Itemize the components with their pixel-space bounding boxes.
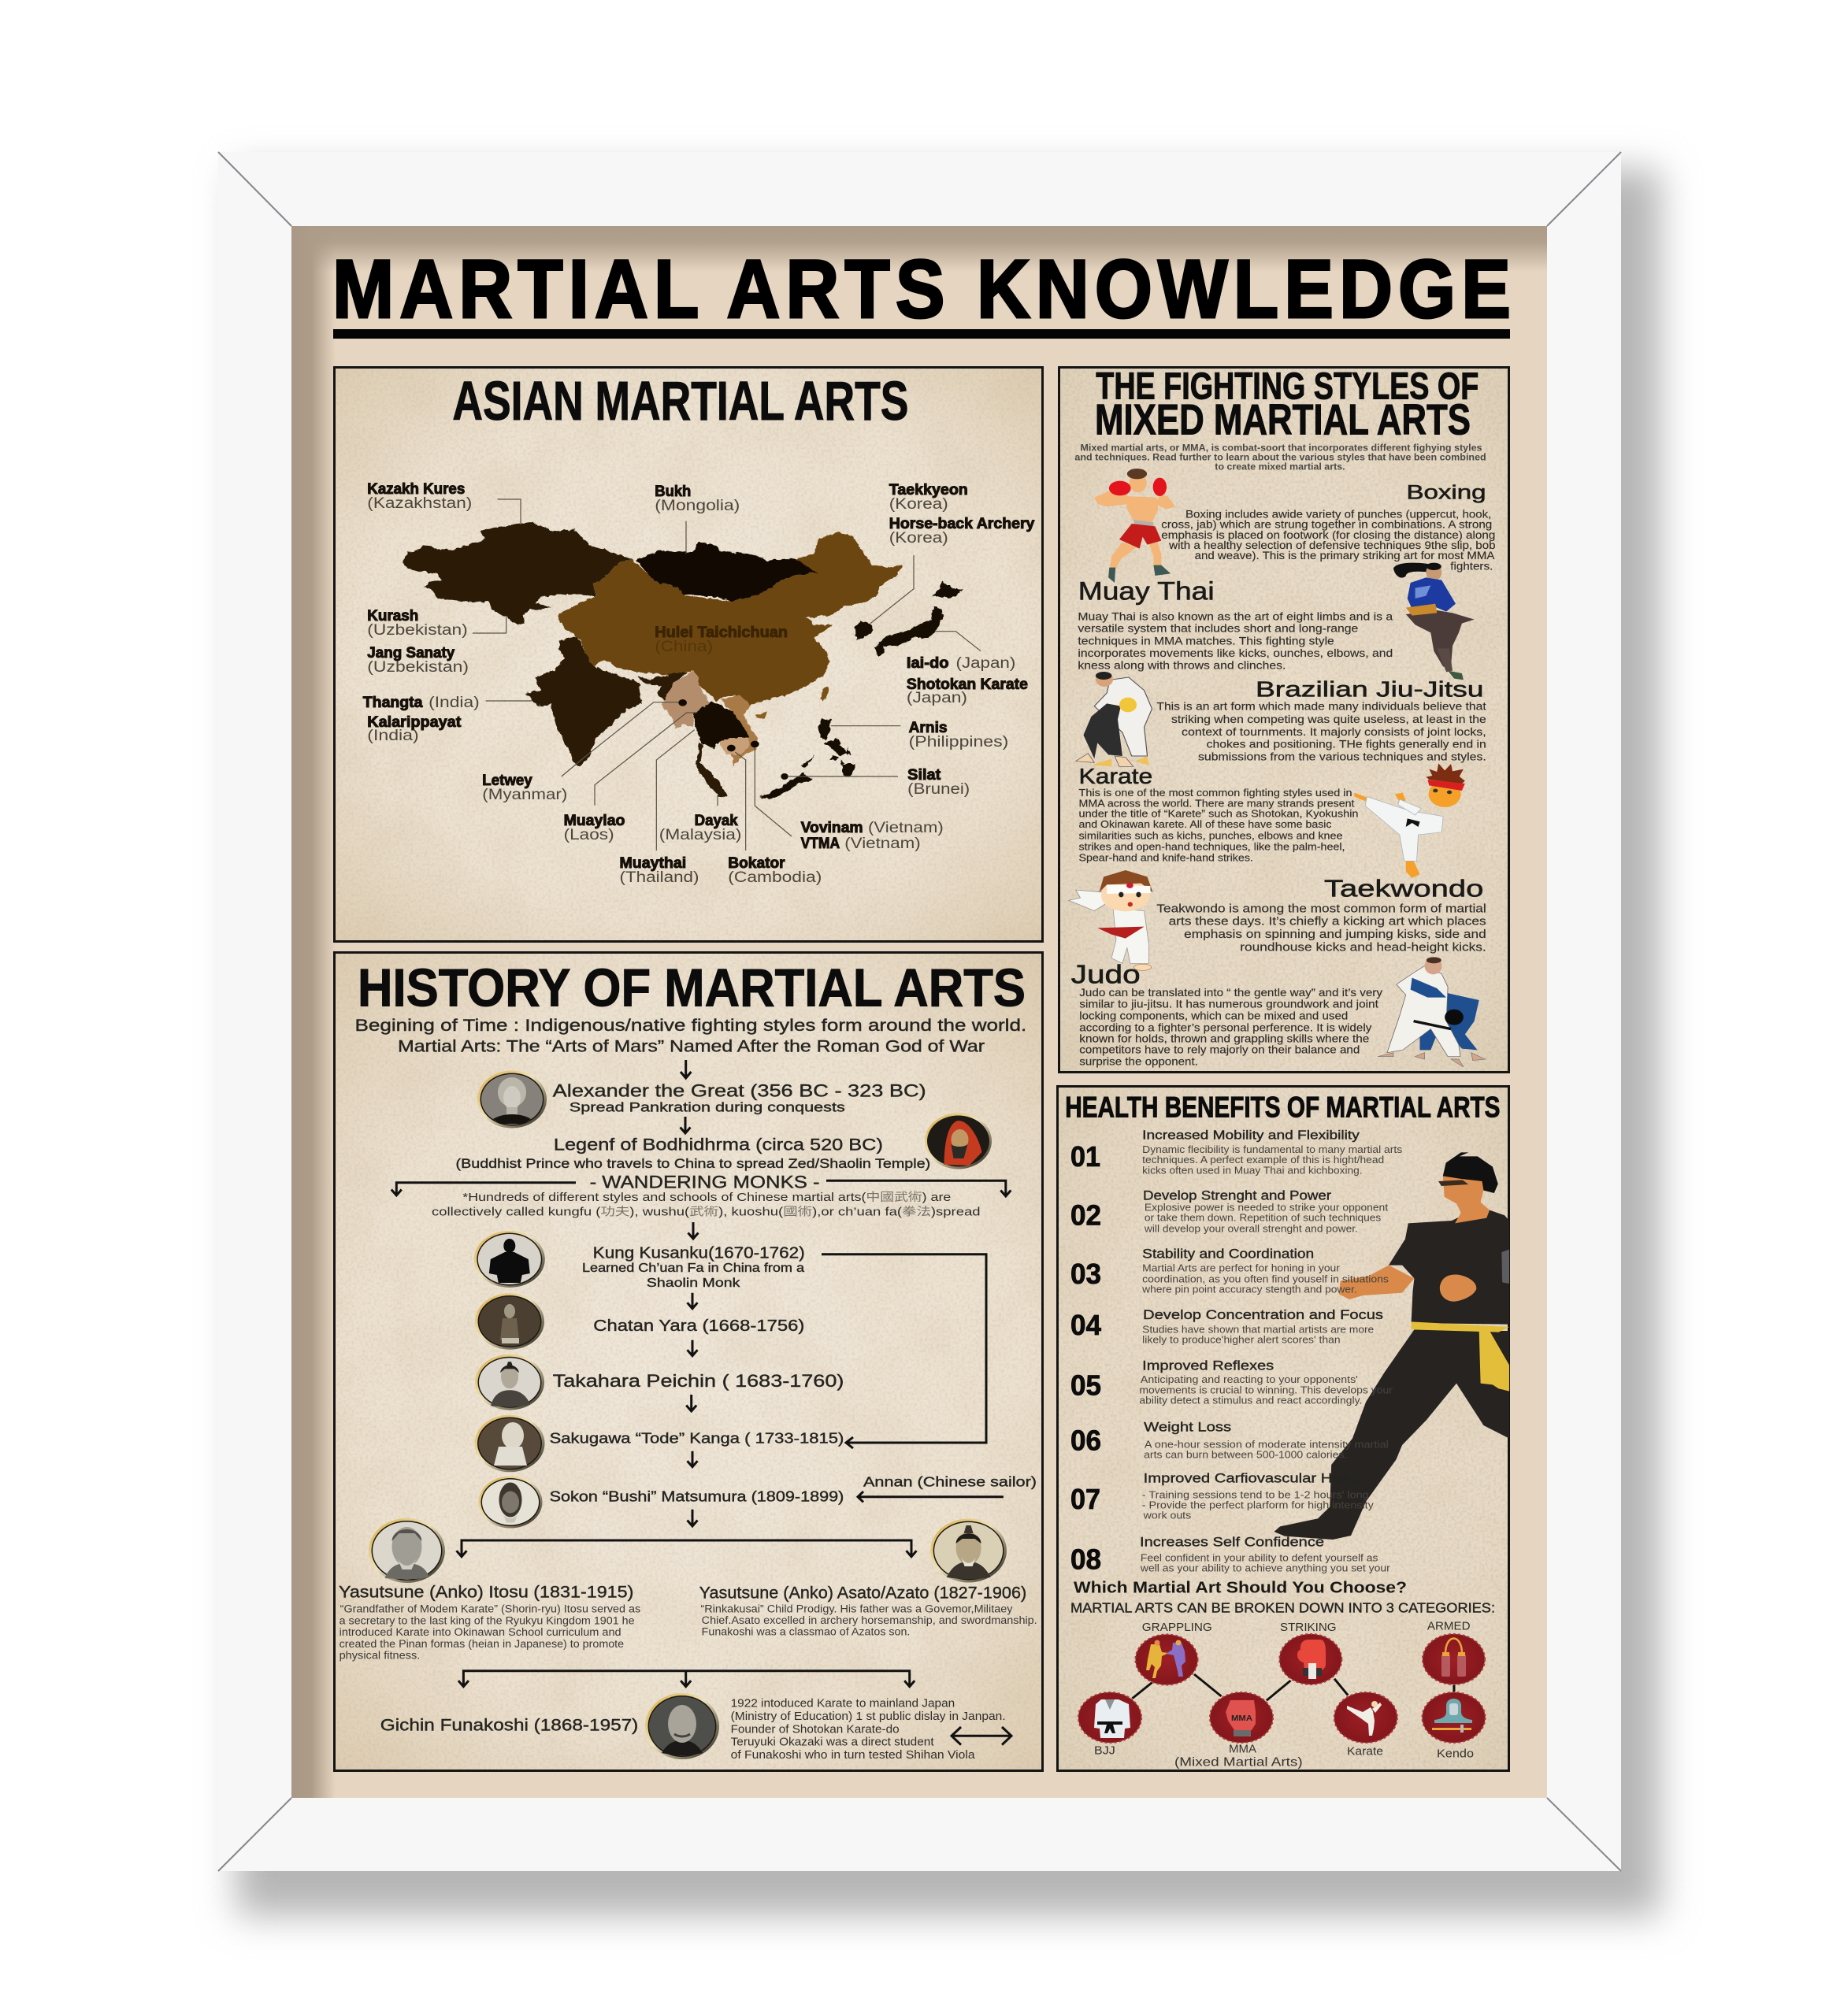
takahara text: Takahara Peichin ( 1683-1760) xyxy=(553,1371,844,1391)
icon: judo pair xyxy=(1378,957,1486,1067)
portrait: bodhidharma xyxy=(925,1114,992,1169)
benefit 05: ability detect a stimulus and react accordingly. xyxy=(1139,1395,1362,1406)
categories subheading: MARTIAL ARTS CAN BE BROKEN DOWN INTO 3 CATEGORIES: xyxy=(1070,1600,1495,1616)
map labels: Shotokan Karate xyxy=(907,676,1028,693)
bodhidharma text xyxy=(455,1136,930,1171)
frame shadow xyxy=(236,169,1660,1916)
fighter illustration xyxy=(1274,1152,1509,1540)
portrait: funakoshi xyxy=(645,1693,719,1759)
taekwondo text: roundhouse kicks and head-height kicks. xyxy=(1240,940,1486,954)
panel: health benefits xyxy=(1057,1087,1509,1770)
wandering monks heading: - WANDERING MONKS - xyxy=(590,1172,820,1191)
judo text: surprise the opponent. xyxy=(1079,1054,1198,1067)
benefit numbers xyxy=(1070,1140,1101,1576)
judo text xyxy=(1079,986,1382,1067)
karate text: Spear-hand and knife-hand strikes. xyxy=(1079,851,1253,863)
map labels: (Kazakhstan) xyxy=(367,495,472,512)
arrow xyxy=(681,1117,690,1133)
judo text: competitors have to rely majorly on their balance and xyxy=(1079,1043,1360,1055)
benefit 04: Studies have shown that martial artists are more xyxy=(1142,1324,1374,1336)
annan label: Annan (Chinese sailor) xyxy=(863,1474,1037,1490)
map labels: (China) xyxy=(655,639,713,655)
kusanku text xyxy=(582,1245,805,1290)
muay thai text: incorporates movements like kicks, ounches, elbows, and xyxy=(1078,647,1393,659)
boxing text: Boxing includes awide variety of punches (uppercut, hook, xyxy=(1185,508,1491,520)
benefit 02: Develop Strenght and Power xyxy=(1143,1188,1331,1203)
boxing text: fighters. xyxy=(1450,560,1493,572)
benefit 07: Improved Carfiovascular Health xyxy=(1144,1470,1367,1485)
benefit 06 xyxy=(1144,1420,1389,1460)
heading: health benefits: HEALTH BENEFITS OF MARTIAL ARTS xyxy=(1065,1091,1500,1123)
category item labels: Kendo xyxy=(1437,1747,1474,1761)
arrow: converge to funakoshi xyxy=(458,1671,915,1687)
muay thai text: kness along with throws and clinches. xyxy=(1078,658,1286,671)
map labels xyxy=(363,481,1035,886)
jiu-jitsu text: This is an art form which made many individuals believe that xyxy=(1156,700,1486,713)
map labels: (Japan) xyxy=(956,655,1015,672)
portrait: kusanku xyxy=(474,1231,545,1288)
benefit 01: techniques. A perfect example of this is hight/head xyxy=(1142,1154,1384,1166)
icon: karate kicker xyxy=(1334,1692,1397,1743)
map labels: (Vietnam) xyxy=(868,820,944,836)
benefit 04 xyxy=(1142,1307,1383,1346)
benefit 05 xyxy=(1139,1358,1393,1406)
benefit 06: A one-hour session of moderate intensity martial xyxy=(1145,1438,1389,1450)
heading: asian martial arts: ASIAN MARTIAL ARTS xyxy=(452,370,908,432)
benefit 08: well as your ability to achieve anything you set your xyxy=(1140,1562,1391,1573)
icon: kendo mask xyxy=(1423,1692,1486,1743)
portrait: sakugawa xyxy=(474,1415,545,1472)
map labels: Bukh xyxy=(655,484,691,500)
arrow: split to itosu and azato xyxy=(457,1540,917,1557)
chinese arts note: collectively called kungfu ( 功夫 ), wushu( 武術 ), kuoshu( 國術 ),or ch’uan fa( 拳法 )spread xyxy=(432,1205,980,1218)
map labels: (Philippines) xyxy=(909,734,1008,750)
intro text: and techniques. Read further to learn about the various styles that have been combined xyxy=(1074,451,1486,462)
category labels: GRAPPLING xyxy=(1142,1621,1212,1634)
portrait: takahara xyxy=(475,1354,544,1410)
jiu-jitsu text xyxy=(1156,700,1486,763)
itosu text: a secretary to the last king of the Ryukyu Kingdom 1901 he xyxy=(339,1614,635,1626)
funakoshi text: (Ministry of Education) 1 st public dislay in Janpan. xyxy=(731,1710,1006,1723)
bodhidharma text: (Buddhist Prince who travels to China to spread Zed/Shaolin Temple) xyxy=(455,1157,930,1171)
boxing heading: Boxing xyxy=(1407,481,1486,503)
portrait: itosu xyxy=(369,1518,445,1583)
boxing text: emphasis is placed on footwork (for closing the distance) along xyxy=(1161,529,1495,541)
chinese arts note: *Hundreds of different styles and schools of Chinese martial arts( 中國武術 ) are xyxy=(462,1191,951,1204)
map labels: Thangta xyxy=(363,695,423,711)
map labels: Kazakh Kures xyxy=(367,481,465,498)
benefit 06: Weight Loss xyxy=(1144,1420,1231,1435)
karate text: MMA across the world. There are many strands present xyxy=(1079,797,1355,809)
map labels: (India) xyxy=(367,728,419,744)
map labels: (Cambodia) xyxy=(728,869,822,886)
arrow xyxy=(687,1510,698,1526)
map labels: Iai-do xyxy=(907,655,949,672)
icon: jiu-jitsu fighters xyxy=(1076,672,1152,766)
karate text: and Okinawan karete. All of these have some basic xyxy=(1079,818,1332,830)
arrow: annan xyxy=(858,1492,1004,1502)
title rule xyxy=(333,329,1510,339)
heading: fighting styles xyxy=(1095,366,1479,444)
icon: boxing glove xyxy=(1279,1634,1341,1684)
azato text: Yasutsune (Anko) Asato/Azato (1827-1906) xyxy=(699,1584,1026,1602)
itosu text: physical fitness. xyxy=(339,1650,420,1662)
intro lines: Begining of Time : Indigenous/native fighting styles form around the world. xyxy=(354,1017,1026,1035)
azato text: “Rinkakusai” Child Prodigy. His father was a Govemor,Militaey xyxy=(701,1603,1013,1614)
benefit 07: work outs xyxy=(1143,1510,1192,1521)
taekwondo text: Teakwondo is among the most common form of martial xyxy=(1156,902,1486,915)
white picture frame xyxy=(218,152,1621,1871)
judo text: known for holds, thrown and grappling skills where the xyxy=(1079,1032,1370,1044)
muay thai text xyxy=(1078,610,1393,671)
benefit 03: Stability and Coordination xyxy=(1142,1247,1314,1262)
benefit 01: Increased Mobility and Flexibility xyxy=(1142,1129,1360,1143)
benefit 02: will develop your overall strenght and power. xyxy=(1144,1222,1358,1234)
judo text: similar to jiu-jitsu. It has numerous groundwork and joint xyxy=(1079,997,1378,1010)
taekwondo text: arts these days. It’s chiefly a kicking art which places xyxy=(1169,915,1486,928)
map labels: (Korea) xyxy=(889,496,948,513)
benefit 08: Feel confident in your ability to defent yourself as xyxy=(1141,1551,1378,1563)
jiu-jitsu text: context of tournments. It majorly consists of joint locks, xyxy=(1182,725,1486,738)
judo heading: Judo xyxy=(1071,959,1141,988)
chatan yara text: Chatan Yara (1668-1756) xyxy=(593,1317,804,1335)
chinese arts note xyxy=(432,1191,980,1218)
intro lines: Martial Arts: The “Arts of Mars” Named After the Roman God of War xyxy=(398,1038,985,1056)
map labels: (Thailand) xyxy=(619,869,699,886)
arrow: double xyxy=(952,1727,1011,1745)
benefit 02: Explosive power is needed to strike your opponent xyxy=(1145,1202,1389,1214)
boxing text: cross, jab) which are strung together in combinations. A strong xyxy=(1161,519,1492,531)
kusanku text: Kung Kusanku(1670-1762) xyxy=(593,1245,805,1262)
category item labels: BJJ xyxy=(1094,1744,1115,1757)
funakoshi text: 1922 intoduced Karate to mainland Japan xyxy=(731,1697,955,1710)
map labels: Jang Sanaty xyxy=(367,645,455,662)
arrow: kusanku to sakugawa xyxy=(822,1254,986,1448)
map labels: (Brunei) xyxy=(907,781,970,798)
map labels: Bokator xyxy=(728,855,785,872)
muay thai text: versatile system that includes short and long-range xyxy=(1078,622,1359,635)
intro text: to create mixed martial arts. xyxy=(1215,461,1345,472)
map labels: (Uzbekistan) xyxy=(367,659,469,676)
heading: history: HISTORY OF MARTIAL ARTS xyxy=(358,958,1026,1018)
icon: bjj gi xyxy=(1078,1692,1141,1743)
arrow xyxy=(687,1340,698,1356)
benefit numbers: 05 xyxy=(1070,1369,1101,1402)
icon: muay thai fighter xyxy=(1393,563,1475,680)
heading: fighting styles: MIXED MARTIAL ARTS xyxy=(1095,395,1471,444)
panel: fighting styles xyxy=(1059,366,1509,1073)
bodhidharma text: Legenf of Bodhidhrma (circa 520 BC) xyxy=(554,1136,883,1154)
poster background xyxy=(291,226,1547,1798)
boxing text: and weave). This is the primary striking art for most MMA xyxy=(1195,550,1494,561)
funakoshi text xyxy=(731,1697,1006,1762)
arrow: monks left xyxy=(391,1183,576,1195)
funakoshi text: of Funakoshi who in turn tested Shihan Viola xyxy=(731,1749,976,1762)
icon: nunchaku xyxy=(1423,1634,1485,1684)
funakoshi text: Founder of Shotokan Karate-do xyxy=(731,1723,900,1736)
category item labels: (Mixed Martial Arts) xyxy=(1174,1756,1303,1770)
taekwondo text xyxy=(1156,902,1486,954)
karate text: This is one of the most common fighting styles used in xyxy=(1079,787,1352,799)
judo text: according to a fighter’s personal perference. It is widely xyxy=(1079,1021,1371,1033)
map labels: (Vietnam) xyxy=(844,836,921,852)
map labels: Dayak xyxy=(695,813,738,829)
alexander text xyxy=(553,1081,926,1115)
muay thai text: Muay Thai is also known as the art of eight limbs and is a xyxy=(1078,610,1393,622)
intro text: Mixed martial arts, or MMA, is combat-soort that incorporates different fighying styles xyxy=(1081,443,1482,454)
intro lines xyxy=(354,1017,1026,1056)
benefit 07 xyxy=(1142,1470,1374,1521)
benefit 01: kicks often used in Muay Thai and kichboxing. xyxy=(1142,1164,1363,1176)
map labels: (India) xyxy=(429,695,480,711)
map labels: Letwey xyxy=(482,773,532,789)
map labels: (Myanmar) xyxy=(482,787,567,803)
benefit 08 xyxy=(1140,1534,1391,1573)
benefit 05: Improved Reflexes xyxy=(1142,1358,1274,1373)
icon: karate kick xyxy=(1354,763,1465,878)
arrow xyxy=(687,1293,698,1309)
azato text: Chief.Asato excelled in archery horsemanship, and swordmanship. xyxy=(702,1614,1037,1626)
benefit numbers: 08 xyxy=(1070,1544,1101,1576)
azato text: Funakoshi was a classmao of Azatos son. xyxy=(702,1626,910,1638)
kusanku text: Shaolin Monk xyxy=(647,1277,741,1290)
map labels: Vovinam xyxy=(801,820,863,836)
arrow xyxy=(688,1222,698,1239)
benefit 02 xyxy=(1143,1188,1389,1234)
benefit 04: Develop Concentration and Focus xyxy=(1143,1307,1383,1322)
alexander text: Spread Pankration during conquests xyxy=(570,1100,845,1115)
map labels: VTMA xyxy=(801,836,840,852)
muay thai text: techniques in MMA matches. This fighting style xyxy=(1078,634,1334,647)
panel: history xyxy=(334,953,1043,1770)
category labels: ARMED xyxy=(1427,1621,1471,1633)
map of asia xyxy=(403,499,981,850)
benefit numbers: 02 xyxy=(1070,1199,1101,1232)
map labels: Hulei Taichichuan xyxy=(655,624,788,641)
map labels: (Japan) xyxy=(907,690,967,706)
map labels: Silat xyxy=(907,767,941,784)
map labels: (Laos) xyxy=(564,827,614,843)
map labels: Taekkyeon xyxy=(889,482,968,498)
arrow xyxy=(686,1395,696,1411)
benefit 02: or take them down. Repetition of such techniques xyxy=(1145,1212,1382,1224)
azato text xyxy=(699,1584,1037,1638)
portrait: sokon matsumura xyxy=(479,1476,542,1528)
kusanku text: Learned Ch’uan Fa in China from a xyxy=(582,1262,804,1275)
category labels xyxy=(1142,1621,1471,1634)
panel: asian martial arts xyxy=(334,367,1043,942)
jiu-jitsu text: striking when competing was quite useless, at least in the xyxy=(1171,713,1486,725)
itosu text: Yasutsune (Anko) Itosu (1831-1915) xyxy=(339,1583,633,1601)
arrow xyxy=(681,1060,691,1078)
benefit 03: where pin point accuracy stength and power. xyxy=(1141,1284,1357,1295)
portrait: chatan yara xyxy=(475,1293,544,1350)
benefit numbers: 04 xyxy=(1070,1309,1101,1341)
itosu text: created the Pinan formas (heian in Japanese) to promote xyxy=(339,1638,624,1650)
judo text: Judo can be translated into “ the gentle way” and it’s very xyxy=(1079,986,1382,999)
jiu-jitsu text: submissions from the various techniques and styles. xyxy=(1198,750,1486,763)
map labels: (Korea) xyxy=(889,530,948,547)
icon: taekwondo kid xyxy=(1069,870,1153,970)
arrow xyxy=(687,1451,698,1467)
map labels: Kalarippayat xyxy=(367,714,462,731)
arrow: monks right xyxy=(826,1180,1011,1196)
benefit 05: movements is crucial to winning. This develops your xyxy=(1139,1384,1393,1395)
icon: boxer xyxy=(1094,469,1175,583)
benefit 07: - Provide the perfect plarform for high intensity xyxy=(1142,1499,1374,1511)
funakoshi text: Teruyuki Okazaki was a direct student xyxy=(731,1736,934,1749)
category item labels xyxy=(1094,1743,1474,1770)
portrait: alexander xyxy=(477,1071,547,1128)
benefit 08: Increases Self Confidence xyxy=(1140,1534,1324,1549)
map labels: (Mongolia) xyxy=(655,498,740,514)
karate text xyxy=(1079,787,1358,863)
benefit numbers: 03 xyxy=(1070,1258,1101,1290)
map labels: Arnis xyxy=(909,720,948,736)
icon: mma glove: MMA xyxy=(1231,1714,1252,1723)
judo text: locking components, which can be mixed and used xyxy=(1079,1009,1348,1021)
category item labels: Karate xyxy=(1347,1744,1383,1758)
map labels: (Uzbekistan) xyxy=(367,622,468,639)
jiu-jitsu heading: Brazilian Jiu-Jitsu xyxy=(1256,676,1483,701)
category item labels: MMA xyxy=(1229,1743,1256,1756)
karate heading: Karate xyxy=(1079,764,1152,788)
muay thai heading: Muay Thai xyxy=(1078,577,1215,606)
benefit 03 xyxy=(1141,1247,1389,1295)
category diagram connectors xyxy=(1133,1674,1454,1700)
category labels: STRIKING xyxy=(1280,1621,1337,1634)
benefit numbers: 06 xyxy=(1070,1425,1101,1457)
map labels: Muaylao xyxy=(564,813,625,829)
sokon text: Sokon “Bushi” Matsumura (1809-1899) xyxy=(550,1489,844,1505)
benefit 04: likely to produce'higher alert scores' than xyxy=(1142,1334,1341,1346)
sakugawa text: Sakugawa “Tode” Kanga ( 1733-1815) xyxy=(550,1431,844,1447)
benefit numbers: 01 xyxy=(1070,1140,1100,1173)
heading: fighting styles: THE FIGHTING STYLES OF xyxy=(1096,366,1479,408)
map labels: Horse-back Archery xyxy=(889,516,1035,532)
benefit 03: coordination, as you often find youself in situations xyxy=(1142,1273,1389,1284)
alexander text: Alexander the Great (356 BC - 323 BC) xyxy=(553,1081,926,1101)
itosu text: introduced Karate into Okinawan School curriculum and xyxy=(339,1626,621,1638)
benefit 01 xyxy=(1142,1129,1403,1176)
main title: MARTIAL ARTS KNOWLEDGE xyxy=(332,243,1516,335)
karate text: similarities such as kichs, punches, elbows and knee xyxy=(1079,829,1342,841)
karate text: under the title of “Karete” such as Shotokan, Kyokushin xyxy=(1079,808,1358,820)
karate text: strikes and open-hand techniques, like the palm-heel, xyxy=(1079,840,1345,852)
map labels: (Malaysia) xyxy=(659,827,742,843)
benefit 07: - Training sessions tend to be 1-2 hours' long xyxy=(1142,1489,1369,1501)
benefit 06: arts can burn between 500-1000 calories. xyxy=(1144,1448,1347,1460)
itosu text xyxy=(339,1583,640,1662)
benefit 03: Martial Arts are perfect for honing in your xyxy=(1142,1262,1341,1273)
boxing text: with a healthy selection of defensive techniques 9the slip, bob xyxy=(1168,539,1496,551)
question heading: Which Martial Art Should You Choose? xyxy=(1074,1580,1407,1597)
boxing text xyxy=(1161,508,1496,572)
map labels: Kurash xyxy=(367,608,418,624)
jiu-jitsu text: chokes and positioning. THe fights generally end in xyxy=(1207,737,1486,750)
benefit 05: Anticipating and reacting to your opponents' xyxy=(1141,1373,1358,1385)
intro text xyxy=(1074,443,1486,472)
benefit 01: Dynamic flecibility is fundamental to many martial arts xyxy=(1142,1143,1403,1155)
benefit numbers: 07 xyxy=(1070,1483,1100,1515)
icon: mma glove xyxy=(1210,1692,1273,1743)
portrait: azato xyxy=(930,1518,1007,1583)
taekwondo text: emphasis on spinning and jumping kisks, side and xyxy=(1184,928,1486,941)
itosu text: “Grandfather of Modem Karate” (Shorin-ryu) Itosu served as xyxy=(340,1603,640,1615)
icon: grappling xyxy=(1136,1635,1197,1685)
map labels: Muaythai xyxy=(619,855,686,872)
funakoshi name: Gichin Funakoshi (1868-1957) xyxy=(380,1717,638,1735)
taekwondo heading: Taekwondo xyxy=(1324,874,1483,902)
